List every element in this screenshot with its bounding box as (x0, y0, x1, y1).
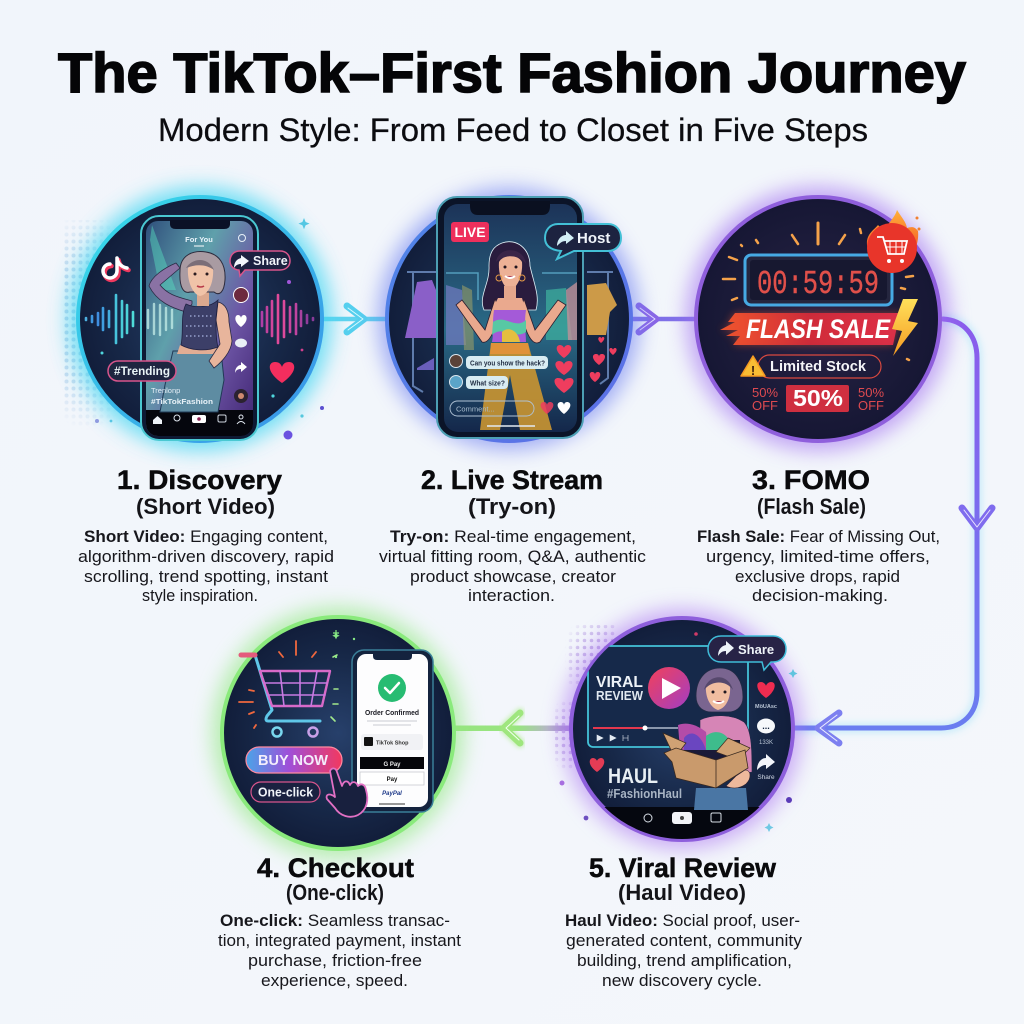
discount tags: 50% (752, 385, 778, 400)
callout: host (545, 224, 621, 259)
small sparkles (560, 632, 798, 832)
icon: neon shopping cart (239, 641, 338, 736)
side rail: comments (757, 718, 775, 734)
discount tags: OFF (858, 398, 884, 413)
description: purchase, friction-free (248, 952, 422, 970)
arrow: discovery to live stream (322, 306, 386, 332)
panel: viral review illustration: REVIEW (596, 689, 643, 703)
callout: one-click (251, 782, 320, 802)
phone: order confirmed: Order Confirmed (365, 708, 419, 717)
description: scrolling, trend spotting, instant (84, 568, 328, 586)
description (218, 912, 461, 990)
limited stock pill: ! (751, 363, 755, 378)
panel: viral review illustration: ... (762, 721, 770, 731)
description: product showcase, creator (410, 568, 617, 586)
subheading: (One-click) (286, 880, 384, 905)
callout: share: Share (738, 642, 774, 657)
limited stock pill: Limited Stock (770, 359, 867, 375)
description (78, 528, 334, 605)
description: generated content, community (566, 932, 803, 950)
description: Haul Video: Social proof, user- (565, 912, 800, 930)
discount tags: 50% (793, 385, 843, 411)
live comments (450, 354, 548, 389)
progress bar (593, 727, 645, 729)
phone: for you feed (141, 216, 258, 440)
icon: left heart (590, 758, 604, 772)
description: Short Video: Engaging content, (84, 528, 328, 546)
character: jeans (160, 351, 224, 412)
subheading: (Haul Video) (618, 880, 746, 905)
clothing racks (405, 272, 617, 392)
feed caption: Trenlonp (151, 386, 180, 395)
phone notch (470, 201, 550, 215)
description: tion, integrated payment, instant (218, 932, 461, 950)
background halftone dots (64, 220, 108, 418)
panel: live stream illustration (378, 188, 640, 450)
panel: viral review illustration (555, 609, 802, 849)
character: jeans (694, 788, 748, 810)
description: interaction. (468, 587, 555, 605)
heading: 4. Checkout (257, 853, 414, 883)
phone sound wave (148, 304, 172, 335)
countdown timer: 00:59:59 (757, 266, 879, 303)
countdown timer (745, 255, 892, 305)
description: algorithm-driven discovery, rapid (78, 548, 334, 566)
panel: checkout illustration (212, 607, 464, 859)
badge: live (451, 222, 489, 242)
subheading: (Try-on) (468, 494, 556, 519)
box interior (684, 740, 740, 760)
panel: discovery illustration (62, 187, 332, 451)
icon: confirmed check (378, 674, 406, 702)
character: arms (456, 299, 500, 342)
character: lace arm (149, 263, 192, 312)
description: virtual fitting room, Q&A, authentic (379, 548, 646, 566)
floating hearts (541, 337, 617, 414)
phone: order confirmed: Pay (387, 777, 398, 783)
character: sequin top (181, 300, 218, 350)
character: torso (491, 298, 526, 312)
live comments: What size? (470, 378, 505, 388)
character: hair (696, 668, 743, 712)
player controls (597, 735, 628, 741)
character: pants (480, 343, 552, 430)
description: Flash Sale: Fear of Missing Out, (697, 528, 940, 546)
icon: lightning bolt (892, 299, 918, 356)
video label: VIRAL (596, 674, 643, 691)
panel: viral review illustration: Share (757, 774, 775, 781)
callout: host: Host (577, 230, 610, 247)
step 3 text (697, 465, 940, 605)
character: neck and head (197, 292, 209, 306)
description: style inspiration. (142, 587, 258, 605)
limited stock pill (741, 355, 881, 378)
comment input (450, 401, 534, 416)
button: buy now: BUY NOW (258, 752, 329, 769)
discount tags (752, 385, 884, 413)
bottom navigation (153, 415, 245, 424)
phone label: for you: For You (185, 235, 213, 244)
burst rays (723, 223, 913, 360)
description: new discovery cycle. (602, 972, 762, 990)
haul label: HAUL (608, 765, 658, 788)
subtitle: Modern Style: From Feed to Closet in Five Steps (158, 112, 868, 148)
panel: FOMO flash sale illustration (686, 187, 950, 451)
discount tags: 50% (858, 385, 884, 400)
sparkles (332, 630, 355, 658)
character: hair back (482, 242, 537, 310)
character: head (499, 256, 522, 290)
description: building, trend amplification, (577, 952, 792, 970)
phone: live stream (437, 197, 583, 438)
description: One-click: Seamless transac- (220, 912, 450, 930)
icon: TikTok note (103, 258, 128, 280)
description: Try-on: Real-time engagement, (390, 528, 636, 546)
flash sale banner: FLASH SALE (746, 314, 891, 344)
play button (648, 667, 690, 709)
description: exclusive drops, rapid (735, 568, 900, 586)
phone notch (170, 220, 230, 229)
heading: 3. FOMO (752, 465, 870, 495)
callout: trending (108, 361, 176, 381)
icon: pointing hand (327, 768, 367, 817)
step 1 text (78, 465, 334, 605)
arrow: FOMO to viral review (795, 319, 992, 743)
character: skin and arms (177, 345, 219, 354)
phone: for you feed: #TikTokFashion (151, 397, 213, 406)
panel: viral review illustration: 133K (759, 740, 773, 746)
icon: heart (270, 362, 294, 383)
description (565, 912, 803, 990)
chart: left sound wave (86, 295, 133, 343)
arrow: viral review to checkout (455, 713, 570, 743)
callout: share: Share (253, 254, 288, 268)
description (697, 528, 940, 605)
arrow: live stream to FOMO (632, 306, 695, 332)
panel: viral review illustration: #FashionHaul (607, 787, 682, 801)
callout: share (230, 251, 290, 276)
description (379, 528, 646, 605)
phone: order confirmed (352, 650, 433, 812)
description: urgency, limited-time offers, (706, 548, 930, 566)
box contents (678, 724, 708, 750)
phone: order confirmed: G Pay (383, 762, 401, 768)
video frame (588, 646, 748, 747)
side rail icons (234, 288, 248, 403)
callout: trending: #Trending (114, 364, 170, 378)
bottom navigation (604, 807, 760, 839)
heading: 1. Discovery (117, 465, 282, 495)
payment rows (361, 734, 423, 750)
title: The TikTok–First Fashion Journey (58, 41, 966, 104)
phone: order confirmed: PayPal (382, 791, 402, 797)
heading: 5. Viral Review (589, 853, 777, 883)
live comments: Can you show the hack? (470, 358, 545, 368)
sparkles (95, 218, 324, 440)
screen racks and clothes (446, 273, 578, 300)
step 2 text (379, 465, 646, 605)
subheading: (Flash Sale) (757, 494, 866, 519)
phone: live stream: Comment... (456, 404, 495, 414)
panel: viral review illustration: MöUAsc (755, 704, 777, 710)
badge: live: LIVE (454, 224, 486, 240)
character: sweater (700, 716, 752, 774)
step 5 text (565, 853, 803, 990)
icon: flaming cart (867, 210, 920, 273)
background halftone dots (565, 625, 615, 685)
phone: order confirmed: TikTok Shop (376, 740, 409, 746)
step 4 text (218, 853, 461, 990)
cardboard box (662, 732, 686, 750)
button: buy now (246, 747, 342, 773)
subheading: (Short Video) (136, 494, 275, 519)
side rail: share (757, 754, 775, 770)
description: decision-making. (752, 587, 888, 605)
callout: one-click: One-click (258, 784, 314, 800)
description: experience, speed. (261, 972, 408, 990)
chart: right sound wave (262, 295, 313, 343)
callout: share (708, 636, 786, 670)
heading: 2. Live Stream (421, 465, 603, 495)
side rail: likes (757, 682, 775, 698)
discount tags: OFF (752, 398, 778, 413)
